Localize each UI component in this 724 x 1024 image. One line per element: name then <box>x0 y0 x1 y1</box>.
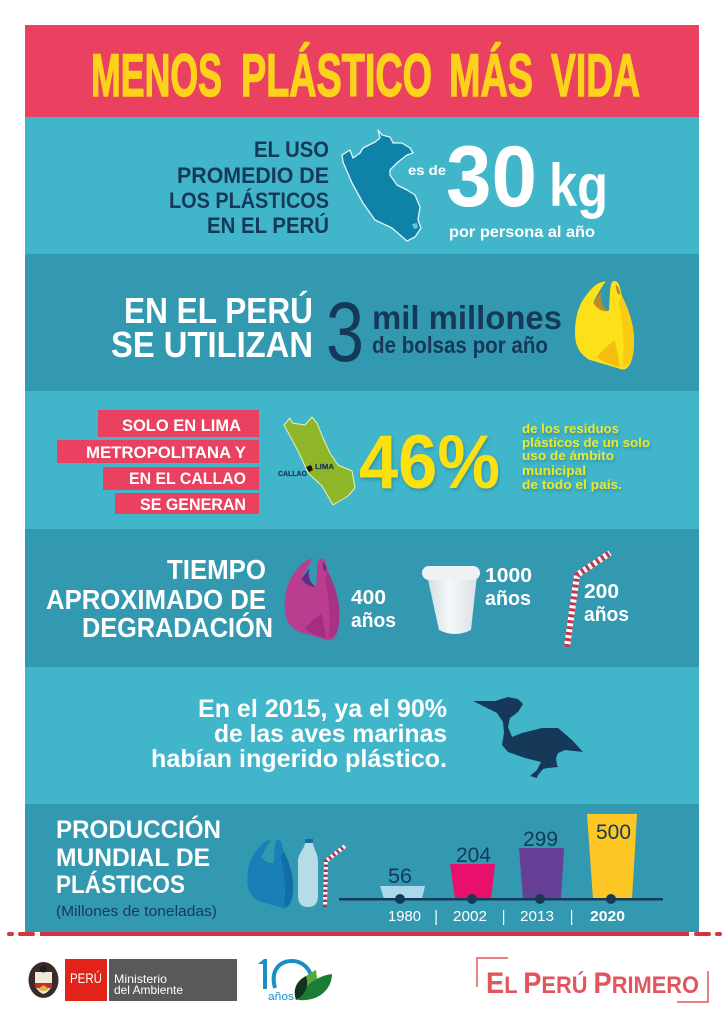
title: MENOS <box>91 42 222 109</box>
heading: degradation time: DEGRADACIÓN <box>82 612 273 643</box>
label bars: only in Lima: EN EL CALLAO <box>129 469 246 488</box>
text: share of plastic waste: de los residuos <box>522 422 619 436</box>
bar chart: plastic production: 2002 <box>453 908 487 925</box>
text: seabirds statistic: habían ingerido plástico. <box>151 745 447 773</box>
logo: 10 años: años <box>268 991 295 1003</box>
label bars: only in Lima <box>57 410 259 514</box>
logo: Ministerio del Ambiente <box>28 959 237 1001</box>
icon: magenta bag <box>285 559 339 641</box>
panel: average use <box>25 117 699 254</box>
logo: Ministerio del Ambiente: PERÚ <box>70 970 102 986</box>
heading: average use: PROMEDIO DE <box>177 163 329 188</box>
panel: degradation time <box>25 529 699 667</box>
bar chart: plastic production: 299 <box>523 828 558 851</box>
heading: degradation time: TIEMPO <box>167 554 266 585</box>
stat: 3 mil millones: 3 <box>326 285 364 379</box>
icon: plastic bottle <box>298 839 318 907</box>
bar chart: plastic production: 1980 <box>388 908 421 925</box>
label bars: only in Lima: SE GENERAN <box>140 495 246 514</box>
logo: 10 años <box>258 959 332 1003</box>
label: 400 years: años <box>351 610 396 632</box>
icon: foam cup <box>422 566 480 634</box>
text: share of plastic waste <box>522 422 650 492</box>
text: share of plastic waste: municipal <box>522 464 586 478</box>
title: PLÁSTICO <box>241 42 432 109</box>
bar chart: plastic production: 2020 <box>590 908 625 925</box>
stat: 30 kg per person: 30 <box>446 129 537 225</box>
stat: 30 kg per person <box>408 129 608 241</box>
stat: 3 mil millones <box>326 285 562 379</box>
icon: coat of arms <box>28 962 58 998</box>
panel: seabirds <box>25 667 699 804</box>
panel: world production <box>25 804 699 932</box>
heading: world production: MUNDIAL DE <box>56 844 210 872</box>
bar chart: plastic production: 56 <box>388 865 412 888</box>
label bars: only in Lima: SOLO EN LIMA <box>122 416 241 435</box>
logo: Ministerio del Ambiente: Ministerio <box>114 972 167 986</box>
text: seabirds statistic: En el 2015, ya el 90% <box>198 695 447 723</box>
text: share of plastic waste: uso de ámbito <box>522 449 614 463</box>
heading: degradation time: APROXIMADO DE <box>46 584 266 615</box>
bar chart: plastic production <box>339 814 663 925</box>
stat: 30 kg per person: es de <box>408 163 447 178</box>
stat: 46 percent: 46% <box>359 420 500 505</box>
stat: 3 mil millones: mil millones <box>372 299 562 336</box>
heading: in Peru they use: SE UTILIZAN <box>111 324 313 365</box>
icon: pelican silhouette <box>473 697 583 778</box>
label: 400 years: 400 <box>351 587 386 609</box>
bar chart: plastic production: 500 <box>596 821 631 844</box>
bar chart: plastic production: 2013 <box>520 908 554 925</box>
text: seabirds statistic <box>151 695 447 773</box>
icon: map of Lima: CALLAO <box>278 469 307 478</box>
heading: average use: EN EL PERÚ <box>207 213 329 238</box>
heading: in Peru they use: EN EL PERÚ <box>124 289 313 331</box>
title: VIDA <box>551 42 640 109</box>
label: 200 years: 200 <box>584 581 619 603</box>
panel: Lima and Callao <box>25 391 699 529</box>
icon: yellow bag <box>575 281 634 369</box>
logo: El Perú Primero: EL PERÚ PRIMERO <box>486 967 699 1000</box>
text: share of plastic waste: plásticos de un solo <box>522 436 650 450</box>
stat: 30 kg per person: por persona al año <box>449 224 595 241</box>
icon: small straw <box>325 846 345 907</box>
title <box>91 42 640 109</box>
label: 1000 years: años <box>485 588 531 610</box>
heading: average use <box>169 137 329 238</box>
icon: striped straw <box>567 553 610 647</box>
logo: Ministerio del Ambiente: del Ambiente <box>114 983 183 997</box>
text: share of plastic waste: de todo el país. <box>522 478 622 492</box>
stat: 30 kg per person: kg <box>549 152 608 219</box>
label: 1000 years <box>485 565 532 610</box>
label: 200 years: años <box>584 604 629 626</box>
text: seabirds statistic: de las aves marinas <box>214 720 447 748</box>
label: 200 years <box>584 581 629 626</box>
heading: world production: PRODUCCIÓN <box>56 814 221 844</box>
heading: degradation time <box>46 554 273 643</box>
label: 1000 years: 1000 <box>485 565 532 587</box>
bar chart: plastic production: 204 <box>456 844 491 867</box>
panel: bags per year <box>25 254 699 391</box>
label bars: only in Lima: METROPOLITANA Y <box>86 443 247 462</box>
stat: 3 mil millones: de bolsas por año <box>372 332 548 358</box>
title: MÁS <box>449 42 533 109</box>
icon: map of Lima: LIMA <box>315 462 335 471</box>
icon: map of Lima <box>278 417 355 505</box>
icon: map of Peru <box>342 130 421 241</box>
heading: world production: PLÁSTICOS <box>56 870 185 899</box>
heading: average use: LOS PLÁSTICOS <box>169 188 329 213</box>
icon: blue bag <box>247 840 293 908</box>
heading: world production <box>56 814 221 899</box>
label: 400 years <box>351 587 396 632</box>
text: unit note: (Millones de toneladas) <box>56 904 217 920</box>
heading: in Peru they use <box>111 289 313 365</box>
heading: average use: EL USO <box>254 137 329 162</box>
panel: title banner <box>25 25 699 117</box>
